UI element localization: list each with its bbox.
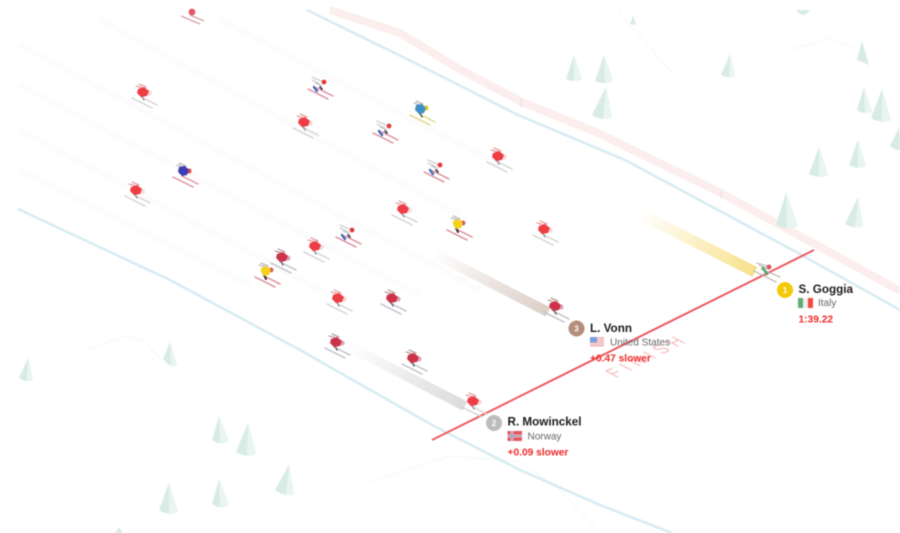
label: S. Goggia <box>777 282 854 326</box>
faint ski tracks on the slope <box>20 20 500 295</box>
country: United States <box>610 338 670 348</box>
skier: purple suit with red skis <box>173 163 198 187</box>
blue upper course edge <box>307 10 900 310</box>
time gap: +0.47 slower <box>590 354 651 364</box>
run trail: R. Mowinckel <box>352 348 465 406</box>
run trail: L. Vonn <box>433 253 548 312</box>
country: Italy <box>818 298 836 309</box>
winning time: 1:39.22 <box>798 314 833 326</box>
skier: yellow suit, left <box>255 263 280 287</box>
skier: blue suit with yellow skis <box>410 101 435 125</box>
rank badge 2: 2 <box>492 419 497 428</box>
skiers: white suits <box>308 77 449 247</box>
skiers: red suits <box>125 9 569 417</box>
rank badge 3: 3 <box>574 324 579 334</box>
name: R. Mowinckel <box>508 416 582 428</box>
name: L. Vonn <box>590 322 632 335</box>
blue lower course edge <box>18 209 672 533</box>
skier: yellow suit <box>447 216 472 240</box>
flag: Italy <box>798 298 813 308</box>
flag: United States <box>590 337 604 346</box>
label: L. Vonn <box>568 320 670 364</box>
finish line <box>432 250 814 440</box>
time gap: +0.09 slower <box>508 448 568 458</box>
skier: S. Goggia at the finish line <box>754 263 780 282</box>
run trail: S. Goggia <box>640 214 755 272</box>
pink course barrier <box>330 10 900 291</box>
name: S. Goggia <box>798 283 854 296</box>
flag: Norway <box>508 431 522 441</box>
finish text on the snow: FINISH <box>600 331 696 380</box>
rank badge 1: 1 <box>783 286 788 295</box>
country: Norway <box>528 432 561 442</box>
label: R. Mowinckel <box>486 415 582 458</box>
